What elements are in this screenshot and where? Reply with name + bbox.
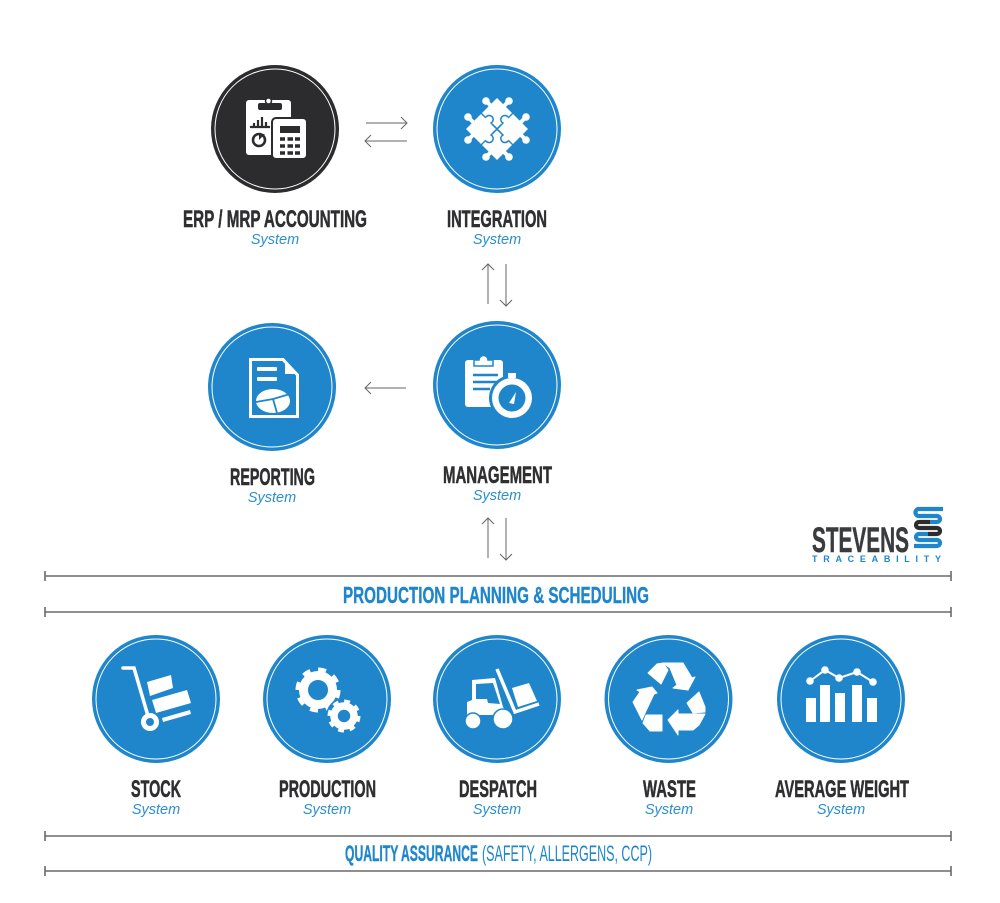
banner text: PRODUCTION PLANNING & SCHEDULING: [343, 582, 649, 608]
label: System: System: [473, 488, 521, 504]
label: System: System: [817, 802, 865, 818]
label: System: System: [473, 802, 521, 818]
panel: Management system: [433, 321, 561, 504]
label: System: System: [645, 802, 693, 818]
banner: Quality Assurance: [45, 831, 951, 876]
heading: Reporting: REPORTING: [230, 464, 315, 491]
panel: ERP / MRP accounting system: [183, 65, 367, 248]
heading: Waste: WASTE: [643, 776, 696, 803]
arrows: Management to and from Production Planning: [482, 518, 512, 560]
logo tagline: Traceability: TRACEABILITY: [812, 554, 941, 564]
panel: Average Weight system: [775, 635, 909, 818]
heading: Production: PRODUCTION: [279, 776, 376, 803]
banner: Production Planning and Scheduling: [45, 571, 951, 617]
icon: recycling badge: [604, 635, 732, 763]
icon: clipboard and stopwatch badge: [433, 321, 561, 449]
logo: Stevens Traceability: [812, 509, 943, 564]
banner text regular: (SAFETY, ALLERGENS, CCP): [482, 841, 652, 866]
panel: Reporting system: [208, 323, 336, 506]
arrow: Management to Reporting: [365, 382, 406, 394]
panel: Despatch system: [433, 635, 561, 818]
heading: ERP / MRP Accounting: ERP / MRP ACCOUNTING: [183, 206, 367, 233]
heading: Stock: STOCK: [131, 776, 181, 803]
panel: Integration system: [433, 65, 561, 248]
panel: Production system: [263, 635, 391, 818]
logo wordmark: Stevens: STEVENS: [812, 521, 909, 560]
label: System: System: [473, 232, 521, 248]
icon: hand truck badge: [92, 635, 220, 763]
icon: bar and line chart badge: [777, 635, 905, 763]
icon: forklift badge: [433, 635, 561, 763]
heading: Integration: INTEGRATION: [447, 206, 547, 233]
arrows: Integration to and from Management: [482, 264, 512, 306]
icon: puzzle pieces badge: [433, 65, 561, 193]
panel: Waste system: [604, 635, 732, 818]
label: System: System: [303, 802, 351, 818]
label: System: System: [248, 490, 296, 506]
arrows: ERP to and from Integration: [365, 117, 407, 147]
logo mark: serpentine: [914, 509, 943, 546]
heading: Management: MANAGEMENT: [443, 462, 552, 489]
label: System: System: [132, 802, 180, 818]
heading: Despatch: DESPATCH: [459, 776, 537, 803]
panel: Stock system: [92, 635, 220, 818]
heading: Average Weight: AVERAGE WEIGHT: [775, 776, 909, 803]
icon: ERP clipboard and calculator badge: [211, 65, 339, 193]
banner text bold: QUALITY ASSURANCE: [345, 841, 478, 866]
icon: report document badge: [208, 323, 336, 451]
icon: gears badge: [263, 635, 391, 763]
label: System: System: [251, 232, 299, 248]
